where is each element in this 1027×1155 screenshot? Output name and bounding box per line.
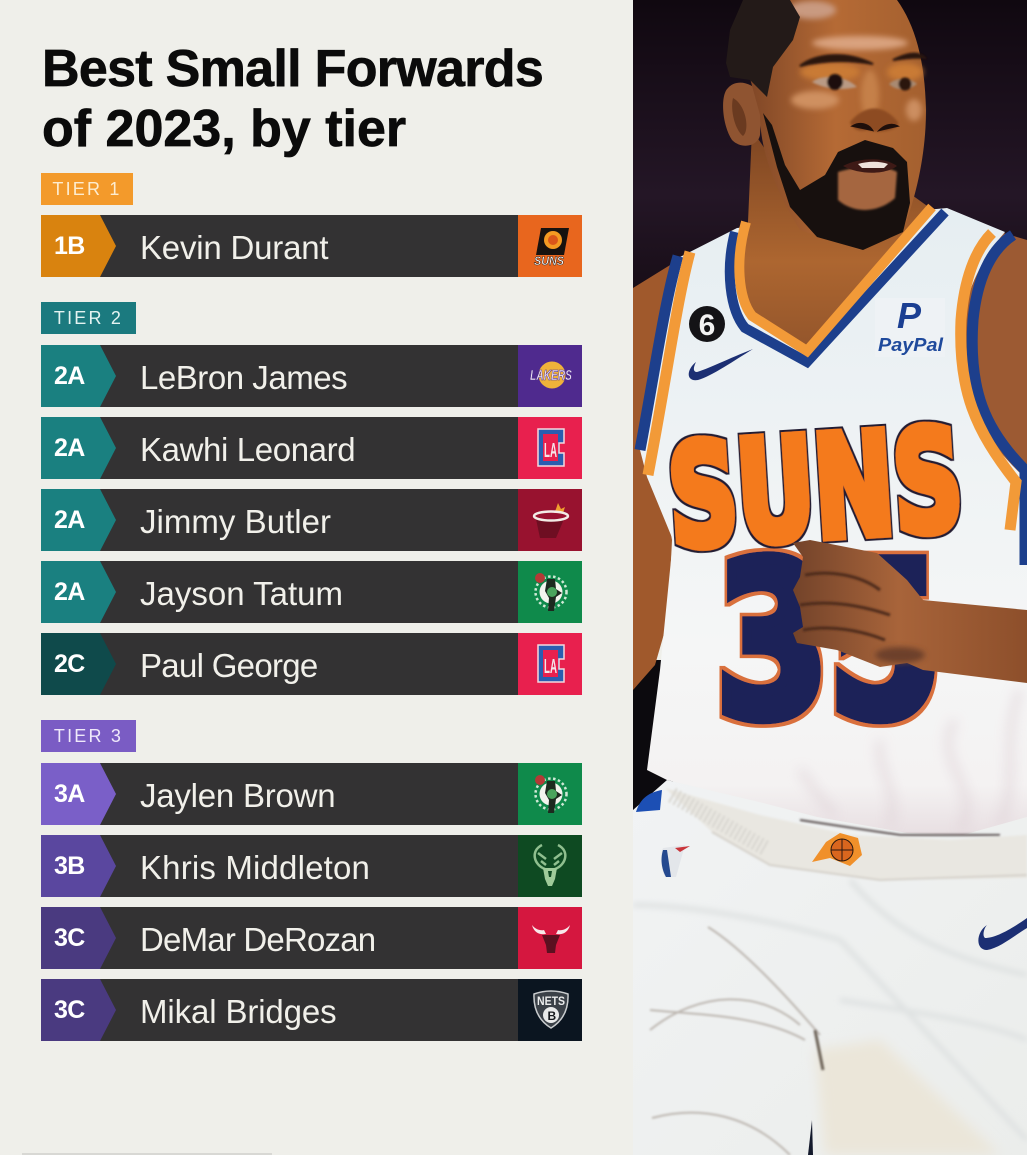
right armhole trim xyxy=(961,233,1025,565)
row: Paul George xyxy=(41,633,582,695)
jersey badge: number 6 xyxy=(689,306,725,342)
row: Khris Middleton xyxy=(41,835,582,897)
player name: Jaylen Brown xyxy=(140,777,335,814)
logo: Brooklyn Nets: B xyxy=(548,1009,556,1023)
rank badge 3C xyxy=(41,979,116,1041)
ear xyxy=(723,83,762,146)
chin patch xyxy=(838,167,897,210)
tier label: tier 1 xyxy=(41,173,133,205)
shorts swoosh xyxy=(978,918,1027,950)
logo: LA Clippers: LA xyxy=(544,440,557,462)
row: Mikal Bridges xyxy=(41,979,582,1041)
rank badge 2A xyxy=(41,417,116,479)
player name: Kawhi Leonard xyxy=(140,431,355,468)
player name: Mikal Bridges xyxy=(140,993,337,1030)
left arm xyxy=(633,265,672,690)
title: of 2023, by tier xyxy=(42,100,406,158)
player name: Khris Middleton xyxy=(140,849,370,886)
logo: Los Angeles Lakers xyxy=(518,345,582,407)
logo: Brooklyn Nets: NETS xyxy=(537,994,565,1008)
eyebrows xyxy=(800,54,925,66)
jersey body xyxy=(640,208,1027,835)
beard xyxy=(763,113,910,250)
Suns logo on waistband xyxy=(812,833,862,866)
tier label: tier 2 xyxy=(41,302,136,334)
rank badge 3A xyxy=(41,763,116,825)
rank badge 3A: 3A xyxy=(54,780,85,808)
jersey number 35: 35 xyxy=(716,519,941,766)
logo: Phoenix Suns: SUNS xyxy=(534,254,564,268)
right shoulder xyxy=(966,233,1027,472)
rank badge 3B xyxy=(41,835,116,897)
face highlights xyxy=(788,1,923,121)
rank badge 3C: 3C xyxy=(54,996,85,1024)
photo background xyxy=(633,0,1027,300)
head xyxy=(723,0,926,250)
row: Jaylen Brown xyxy=(41,763,582,825)
jersey swoosh xyxy=(689,349,753,380)
tier label: tier 1: TIER 1 xyxy=(52,179,122,199)
PayPal patch xyxy=(875,295,945,357)
logo: LA Clippers xyxy=(518,417,582,479)
logo: Boston Celtics xyxy=(518,561,582,623)
player name: Jimmy Butler xyxy=(140,503,331,540)
rank badge 2A xyxy=(41,489,116,551)
collar trim xyxy=(730,207,945,362)
tier label: tier 3: TIER 3 xyxy=(54,726,123,746)
NBA logo xyxy=(661,845,690,877)
logo: Brooklyn Nets xyxy=(518,979,582,1041)
rank badge 1B: 1B xyxy=(54,232,85,260)
rank badge 2A: 2A xyxy=(54,434,85,462)
player name: LeBron James xyxy=(140,359,347,396)
face xyxy=(745,0,926,250)
rank badge 3B: 3B xyxy=(54,852,85,880)
shorts xyxy=(633,780,1027,1155)
waistband xyxy=(665,788,1027,880)
rank badge 1B xyxy=(41,215,116,277)
inner leg shadow area xyxy=(815,1040,1000,1155)
blue undershirt edge xyxy=(636,790,662,812)
row: DeMar DeRozan xyxy=(41,907,582,969)
gap between legs xyxy=(808,1120,813,1155)
rank badge 3C xyxy=(41,907,116,969)
hand and forearm xyxy=(793,540,1027,683)
jersey folds xyxy=(801,694,1022,810)
mouth xyxy=(843,159,897,173)
tier label: tier 2: TIER 2 xyxy=(54,308,123,328)
player name: Kevin Durant xyxy=(140,229,328,266)
logo: LA Clippers: LA xyxy=(544,656,557,678)
dark area beside the torso xyxy=(633,660,673,810)
rank badge 2C xyxy=(41,633,116,695)
neck and chest xyxy=(743,130,930,350)
rank badge 2A xyxy=(41,345,116,407)
title: Best Small Forwards xyxy=(42,40,543,98)
logo: Miami Heat xyxy=(518,489,582,551)
rank badge 2A xyxy=(41,561,116,623)
credit line, cut off at the page edge xyxy=(22,1153,272,1155)
logo: Boston Celtics xyxy=(518,763,582,825)
logo: Milwaukee Bucks xyxy=(518,835,582,897)
row: LeBron James xyxy=(41,345,582,407)
row: Kawhi Leonard xyxy=(41,417,582,479)
logo: Phoenix Suns xyxy=(518,215,582,277)
row: Jayson Tatum xyxy=(41,561,582,623)
logo: LA Clippers xyxy=(518,633,582,695)
rank badge 3C: 3C xyxy=(54,924,85,952)
PayPal patch: P xyxy=(897,295,922,336)
row: Kevin Durant xyxy=(41,215,582,277)
logo: Chicago Bulls xyxy=(518,907,582,969)
player name: Paul George xyxy=(140,647,318,684)
jersey badge: number 6: 6 xyxy=(699,309,715,342)
photo: player in Suns jersey xyxy=(633,0,1027,1155)
player name: DeMar DeRozan xyxy=(140,921,375,958)
row: Jimmy Butler xyxy=(41,489,582,551)
shorts folds xyxy=(650,927,823,1155)
tier label: tier 3 xyxy=(41,720,136,752)
eyes xyxy=(812,74,917,90)
player name: Jayson Tatum xyxy=(140,575,343,612)
left armhole trim xyxy=(640,252,690,475)
rank badge 2A: 2A xyxy=(54,362,85,390)
rank badge 2A: 2A xyxy=(54,506,85,534)
nose xyxy=(850,108,898,132)
hair xyxy=(726,0,800,97)
rank badge 2C: 2C xyxy=(54,650,85,678)
rank badge 2A: 2A xyxy=(54,578,85,606)
title xyxy=(42,40,543,158)
PayPal patch: PayPal xyxy=(878,335,944,355)
jersey wordmark SUNS: SUNS xyxy=(664,400,967,580)
